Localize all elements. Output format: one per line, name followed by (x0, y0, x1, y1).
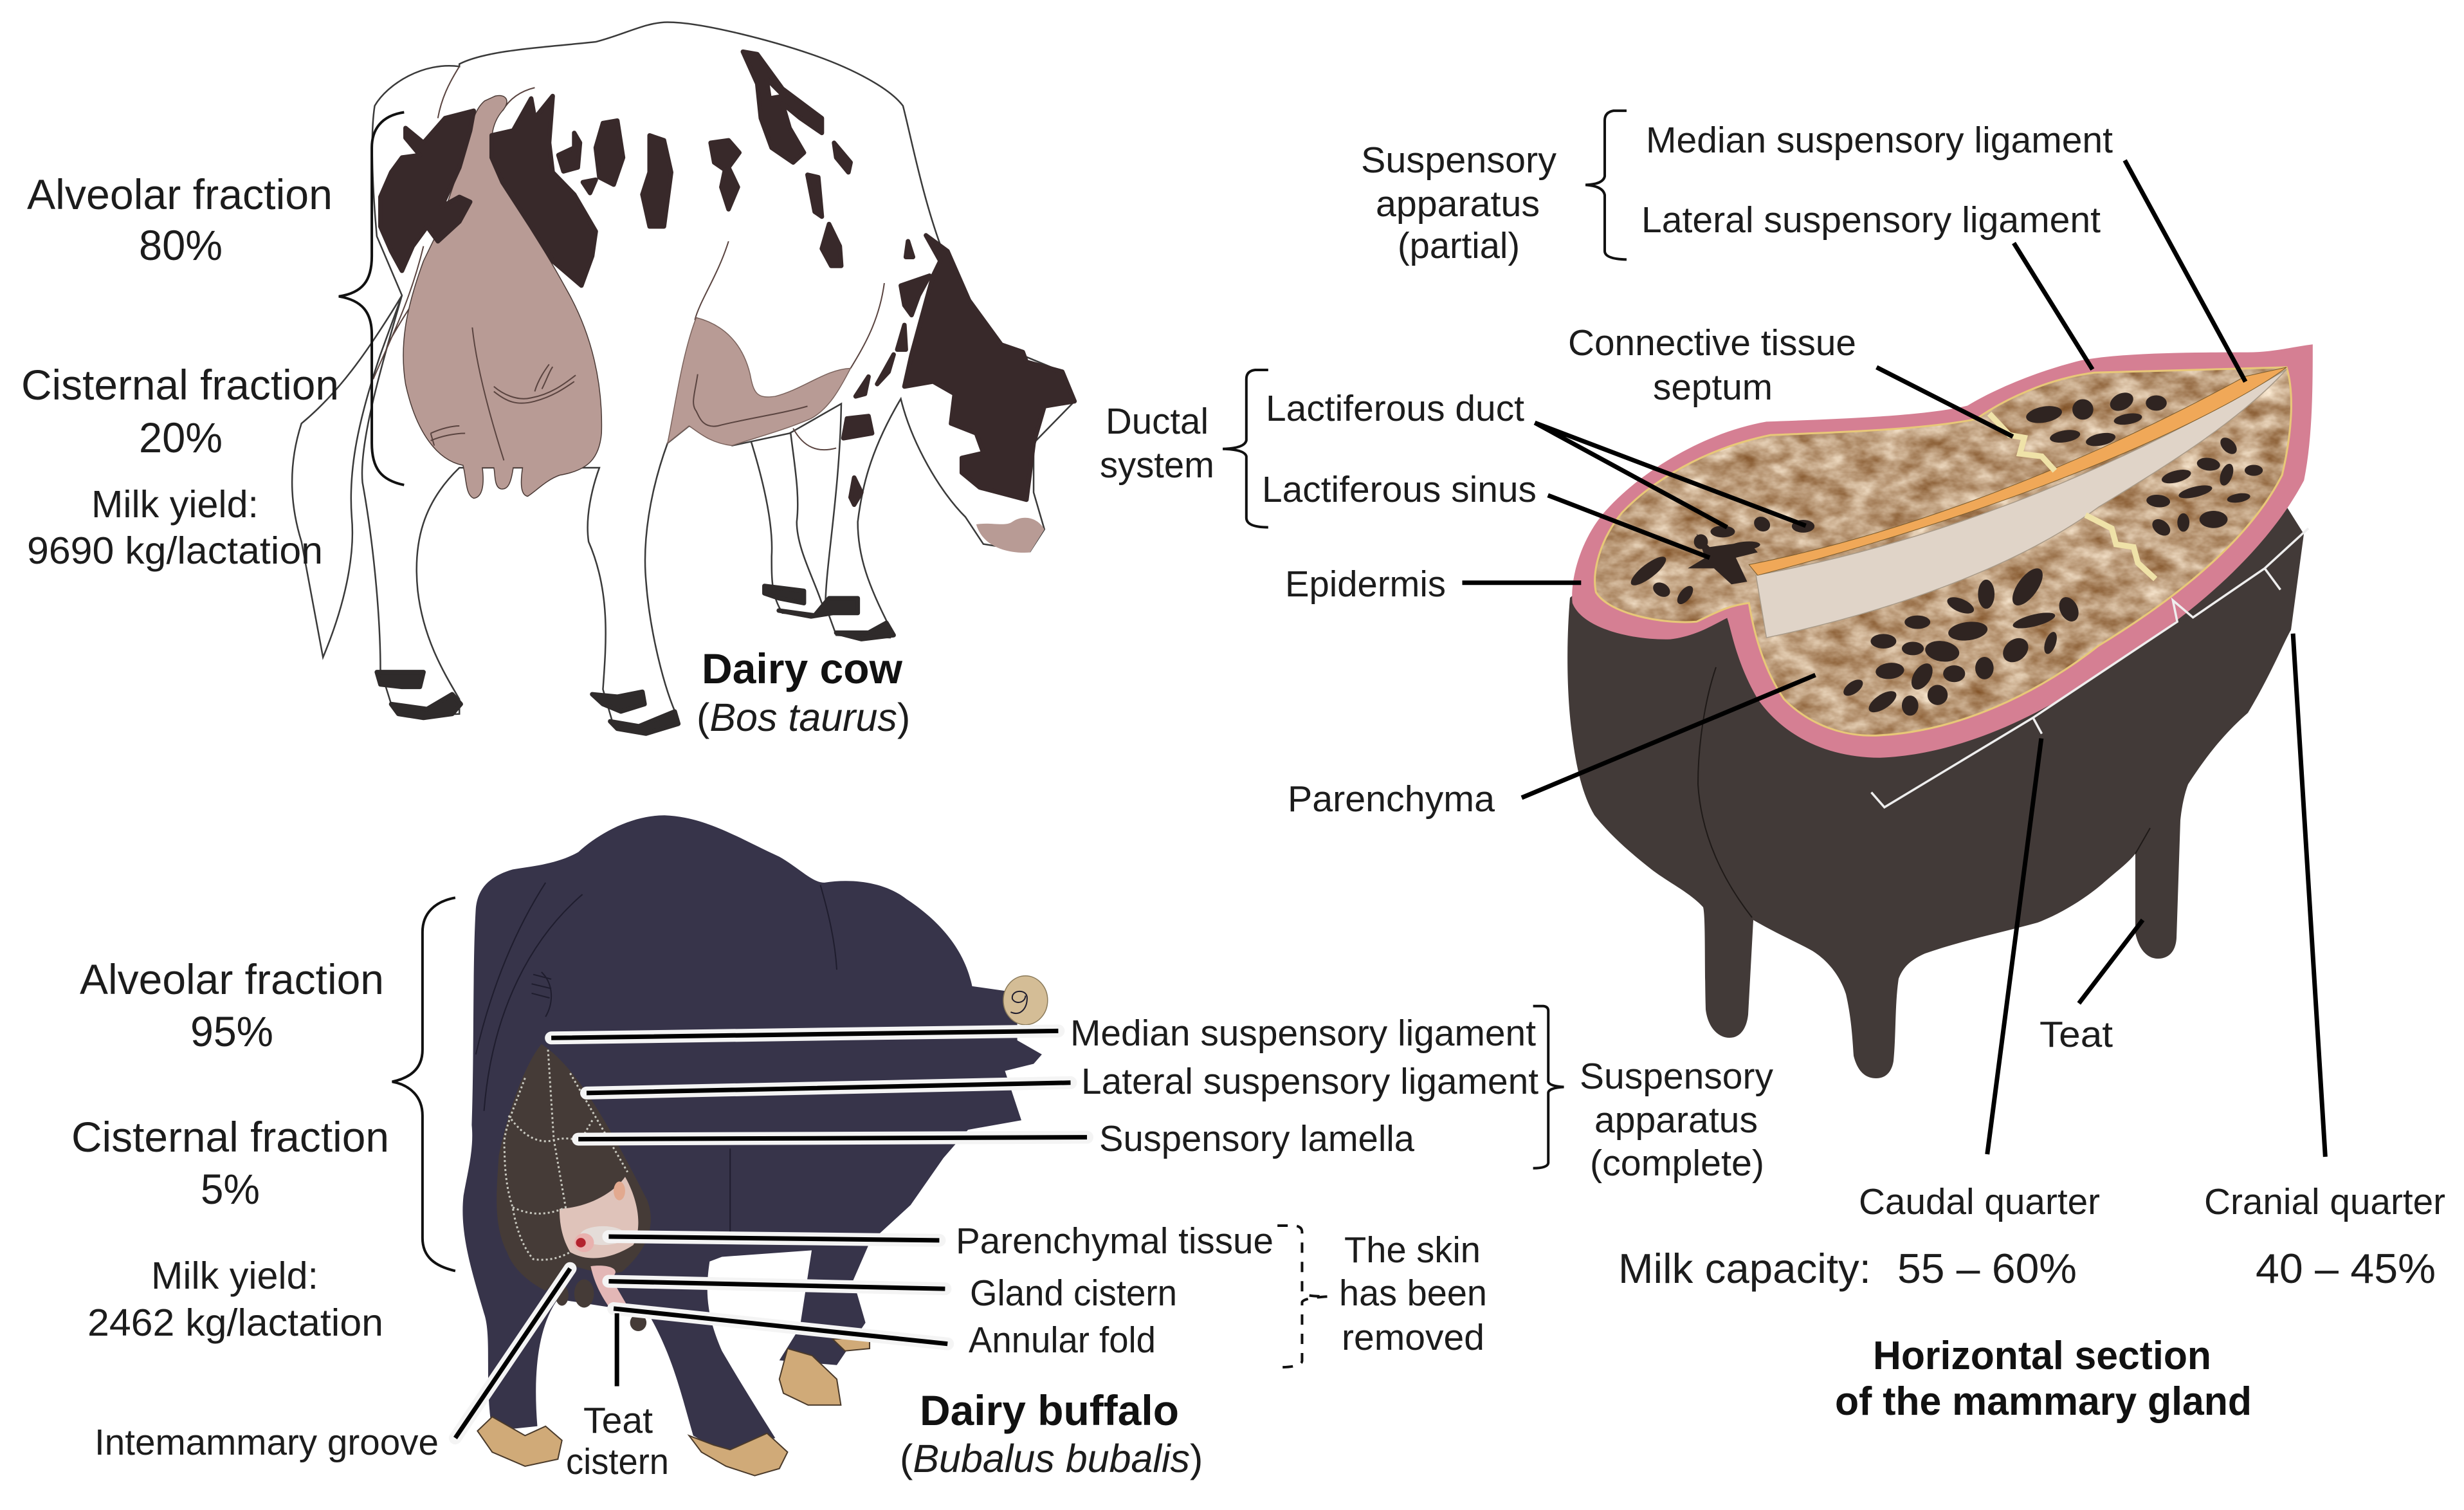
label: intermammary groove: Intemammary groove (95, 1422, 439, 1463)
parenchyma outline (1595, 367, 2291, 735)
leader lines: gland (1462, 160, 2245, 798)
milk yield heading: Milk yield: (151, 1255, 318, 1297)
leader lines (455, 1031, 1087, 1438)
buffalo far hooves (833, 1337, 870, 1351)
label: connective tissue septum: septum (1653, 367, 1773, 408)
buffalo body folds (476, 883, 837, 1233)
label: parenchyma: Parenchyma (1288, 778, 1495, 820)
gland dark body with teats (1567, 450, 2304, 1078)
title: dairy cow: Dairy cow (702, 645, 903, 692)
cow tail (292, 295, 402, 658)
cow brace (339, 112, 404, 485)
pink epidermis (1572, 344, 2313, 758)
dashed bracket: skin removed (1277, 1226, 1328, 1367)
septa (1989, 414, 2155, 579)
bracket: suspensory apparatus complete (1533, 1006, 1564, 1168)
buffalo teats (556, 1280, 646, 1331)
value: 5% (201, 1165, 260, 1213)
label: connective tissue septum (1568, 322, 1856, 408)
label: suspensory apparatus partial (1361, 140, 1556, 266)
cow far hind leg (750, 423, 825, 616)
label: median suspensory ligament: Median suspensory ligament (1646, 120, 2113, 161)
brackets: buffalo (1277, 1006, 1564, 1367)
buffalo hoof (780, 1349, 841, 1405)
label: cisternal fraction 20%: Cisternal fraction (21, 361, 339, 409)
label: annular fold: Annular fold (969, 1320, 1156, 1361)
label: ductal system (1100, 401, 1214, 486)
label: suspensory apparatus partial: (partial) (1398, 225, 1520, 266)
cow muzzle (976, 518, 1045, 553)
title: horizontal section: Horizontal section (1873, 1334, 2211, 1378)
label: parenchymal tissue: Parenchymal tissue (956, 1220, 1273, 1262)
label: lateral suspensory ligament: Lateral suspensory ligament (1081, 1061, 1538, 1102)
label: cistern: cistern (566, 1441, 669, 1482)
caudal capacity: 55 – 60% (1897, 1245, 2077, 1292)
orange median ligament (1749, 367, 2286, 575)
label: suspensory apparatus complete: Suspensory (1580, 1056, 1773, 1097)
title: dairy buffalo: Dairy buffalo (920, 1386, 1179, 1434)
cut surface wedge (1756, 369, 2286, 638)
note: the skin has been removed: The skin (1344, 1229, 1481, 1271)
label: suspensory apparatus complete: (complete) (1590, 1143, 1764, 1184)
tissue highlights (574, 1181, 626, 1252)
cranial capacity: 40 – 45% (2256, 1245, 2436, 1292)
title: horizontal section (1835, 1334, 2252, 1424)
dotted lines (504, 1050, 628, 1260)
leader lines: quarters and teat (1987, 634, 2325, 1157)
illustration: buffalo (455, 815, 1087, 1476)
cow udder (403, 95, 601, 498)
illustration: horizontal section of mammary gland (1223, 111, 2325, 1157)
buffalo labels (71, 955, 1773, 1482)
ducts and sinus left cluster (1625, 516, 1814, 605)
ducts upper cluster (2021, 391, 2167, 449)
buffalo exposed parenchymal tissue (560, 1177, 638, 1258)
body crease lines (1698, 667, 2150, 917)
label: alveolar fraction 80%: Alveolar fraction (27, 170, 333, 218)
value: 80% (139, 221, 223, 269)
milk yield heading: Milk yield: (91, 483, 259, 526)
label: connective tissue septum: Connective tissue (1568, 322, 1856, 364)
ducts right cluster (2144, 436, 2263, 537)
buffalo brace (392, 898, 455, 1271)
label: caudal quarter: Caudal quarter (1859, 1181, 2100, 1222)
gland section group (1223, 111, 2317, 807)
note: the skin has been removed (1339, 1229, 1487, 1358)
label: teat: Teat (2040, 1014, 2113, 1055)
label: gland cistern: Gland cistern (970, 1273, 1177, 1314)
buffalo near hoof (689, 1433, 787, 1476)
buffalo horn (1003, 976, 1048, 1025)
title: horizontal section: of the mammary gland (1835, 1379, 2252, 1424)
label: alveolar fraction 95%: Alveolar fraction (80, 955, 384, 1003)
value: 20% (139, 414, 223, 461)
gland labels (1100, 120, 2445, 1424)
cow hooves (377, 586, 893, 733)
label: suspensory apparatus complete (1580, 1056, 1773, 1184)
label: median suspensory ligament: Median suspensory ligament (1070, 1013, 1536, 1054)
species name: (Bos taurus) (697, 695, 910, 739)
note: the skin has been removed: removed (1342, 1317, 1484, 1358)
milk yield value: 2462 kg/lactation (87, 1302, 383, 1344)
label: lactiferous sinus: Lactiferous sinus (1262, 469, 1537, 510)
label: cisternal fraction 5%: Cisternal fraction (71, 1113, 389, 1161)
label: suspensory apparatus partial: Suspensory (1361, 140, 1556, 181)
buffalo hooves (477, 1417, 562, 1466)
label: ductal system: Ductal (1106, 401, 1209, 442)
illustration: dairy cow (292, 22, 1075, 733)
label: suspensory apparatus partial: apparatus (1376, 183, 1540, 225)
cow labels (21, 170, 910, 739)
bracket: suspensory apparatus partial (1585, 111, 1627, 259)
cow udder veins (431, 327, 576, 461)
label: suspensory lamella: Suspensory lamella (1099, 1118, 1414, 1159)
white quarter brackets (1872, 528, 2308, 807)
note: the skin has been removed: has been (1339, 1273, 1487, 1314)
buffalo udder (497, 1044, 651, 1291)
label: lactiferous duct: Lactiferous duct (1266, 388, 1524, 429)
cow body outline (362, 22, 1075, 733)
value: 95% (190, 1008, 273, 1055)
label: suspensory apparatus complete: apparatus (1594, 1100, 1758, 1141)
label: lateral suspensory ligament: Lateral suspensory ligament (1641, 199, 2101, 241)
buffalo body (462, 815, 1042, 1452)
cow brisket fold (693, 374, 807, 427)
bracket: ductal system (1223, 370, 1268, 528)
leader halos (455, 1031, 1087, 1438)
label: teat: Teat (583, 1400, 653, 1441)
milk capacity heading: Milk capacity: (1618, 1245, 1871, 1292)
cow dark patches (380, 51, 1075, 504)
buffalo gland cistern (590, 1266, 628, 1313)
cow brisket (668, 318, 850, 446)
parenchyma texture (1596, 368, 2290, 735)
buffalo far leg (780, 1243, 870, 1365)
milk yield value: 9690 kg/lactation (27, 529, 323, 572)
cow flank lines (373, 66, 884, 450)
ducts lower cluster (1839, 566, 2081, 715)
label: ductal system: system (1100, 445, 1214, 486)
species name: (Bubalus bubalis) (900, 1437, 1203, 1480)
label: epidermis: Epidermis (1285, 564, 1446, 605)
label: cranial quarter: Cranial quarter (2204, 1181, 2445, 1222)
